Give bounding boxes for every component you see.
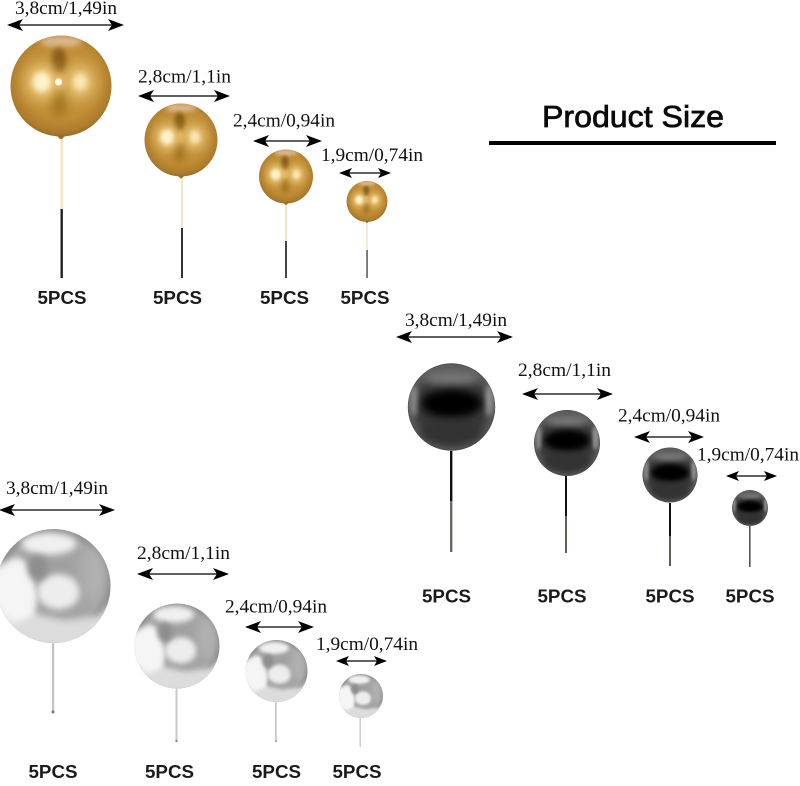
black ball 3.8cm bbox=[396, 310, 513, 607]
panel: silver balls bbox=[0, 478, 418, 782]
black ball 2.4cm: 5PCS bbox=[646, 586, 694, 607]
gold ball 3.8cm: 5PCS bbox=[38, 287, 86, 308]
silver ball 2.8cm: 5PCS bbox=[145, 761, 194, 782]
gold ball 3.8cm bbox=[7, 0, 124, 308]
silver ball 2.8cm bbox=[130, 543, 230, 782]
gold ball 1.9cm: 1,9cm/0,74in bbox=[321, 145, 423, 166]
black ball 2.8cm: 2,8cm/1,1in bbox=[518, 360, 611, 381]
silver ball 2.4cm: 2,4cm/0,94in bbox=[225, 597, 327, 618]
gold ball 2.8cm: 2,8cm/1,1in bbox=[138, 66, 231, 88]
silver ball 1.9cm: 1,9cm/0,74in bbox=[316, 634, 418, 655]
title: Product Size: Product Size bbox=[542, 99, 724, 134]
silver ball 2.4cm: 5PCS bbox=[252, 761, 301, 782]
black ball 2.4cm: 2,4cm/0,94in bbox=[618, 406, 720, 427]
silver ball 3.8cm: 3,8cm/1,49in bbox=[6, 478, 108, 499]
gold ball 2.4cm: 5PCS bbox=[260, 287, 309, 308]
black ball 1.9cm bbox=[697, 445, 799, 607]
silver ball 1.9cm bbox=[316, 634, 418, 782]
panel: gold balls bbox=[7, 0, 423, 308]
silver ball 2.4cm bbox=[225, 597, 327, 782]
black ball 2.8cm bbox=[518, 360, 613, 607]
black ball 2.4cm bbox=[618, 406, 720, 607]
black ball 3.8cm: 3,8cm/1,49in bbox=[405, 310, 507, 331]
title: Product Size bbox=[489, 99, 776, 145]
silver ball 1.9cm: 5PCS bbox=[332, 761, 382, 782]
black ball 2.8cm: 5PCS bbox=[538, 586, 586, 607]
gold ball 1.9cm bbox=[321, 145, 423, 308]
gold ball 2.4cm bbox=[233, 111, 335, 308]
gold ball 2.8cm: 5PCS bbox=[153, 287, 202, 308]
silver ball 2.8cm: 2,8cm/1,1in bbox=[137, 543, 230, 564]
black ball 1.9cm: 1,9cm/0,74in bbox=[697, 445, 799, 466]
black ball 1.9cm: 5PCS bbox=[726, 586, 774, 607]
silver ball 3.8cm: 5PCS bbox=[28, 761, 78, 782]
panel: black balls bbox=[396, 310, 799, 607]
black ball 3.8cm: 5PCS bbox=[422, 586, 471, 607]
silver ball 3.8cm bbox=[0, 478, 116, 782]
gold ball 1.9cm: 5PCS bbox=[340, 287, 390, 308]
gold ball 2.4cm: 2,4cm/0,94in bbox=[233, 111, 335, 132]
gold ball 2.8cm bbox=[138, 66, 231, 308]
